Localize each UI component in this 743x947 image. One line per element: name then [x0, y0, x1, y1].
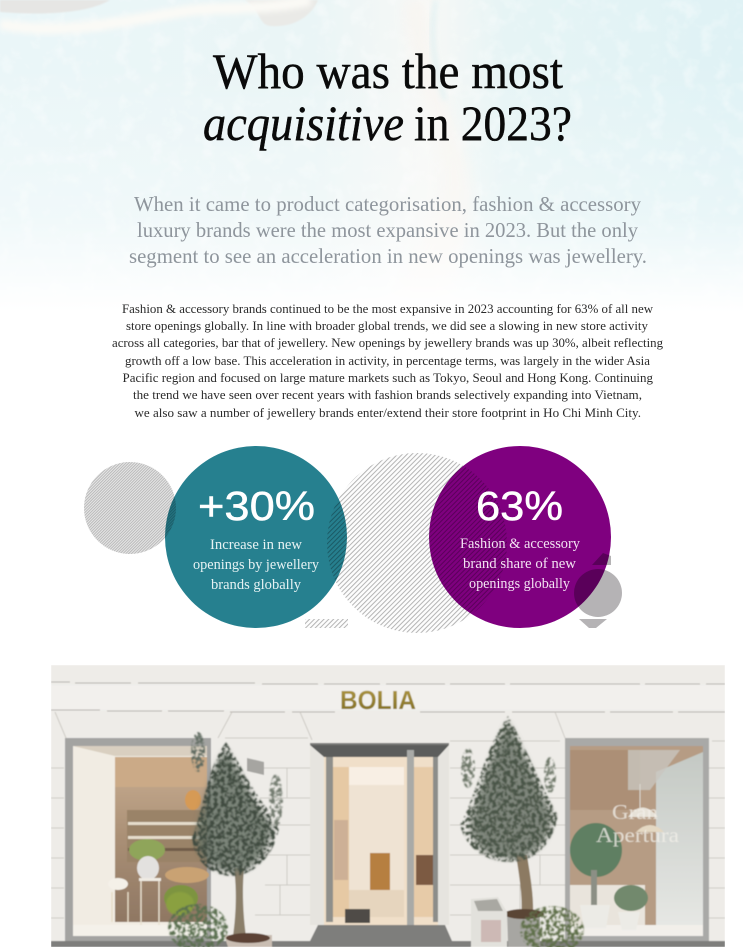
body paragraph: Pacific region and focused on large mature markets such as Tokyo, Seoul and Hong Kong. Continuing: [122, 371, 654, 385]
facade wall: [51, 665, 725, 947]
decorative hatched strip: [305, 619, 348, 628]
pavement: [51, 925, 725, 947]
stat circles group: [84, 446, 622, 633]
store sign: BOLIA: [340, 685, 416, 715]
title: [203, 43, 572, 151]
decorative grey shapes: [574, 553, 622, 628]
stat circle fill: teal: [165, 446, 347, 628]
body paragraph: store openings globally. In line with broader global trends, we did see a slowing in new store activity: [126, 319, 649, 333]
window lettering: [596, 800, 680, 847]
intro text: segment to see an acceleration in new openings was jewellery.: [129, 244, 647, 268]
intro text: When it came to product categorisation, fashion & accessory: [134, 192, 641, 216]
ticket box: [471, 897, 507, 947]
stat: +30%: [193, 483, 320, 593]
title: Who was the most: [213, 43, 563, 99]
title: in 2023?: [414, 95, 572, 151]
store photo: BOLIA facade: [51, 665, 725, 947]
entrance door: [310, 743, 449, 925]
left window: [65, 738, 211, 941]
stat: +30%: openings by jewellery: [193, 557, 320, 573]
intro text: [129, 192, 647, 268]
window lettering: Gran: [612, 800, 659, 824]
body paragraph: across all categories, bar that of jewellery. New openings by jewellery brands was up 30%, albeit reflecting: [112, 336, 664, 350]
wall lamp: [247, 758, 264, 775]
stat: 63%: 63%: [476, 483, 563, 529]
window lettering: Apertura: [596, 823, 680, 847]
body paragraph: Fashion & accessory brands continued to be the most expansive in 2023 accounting for 63% of all new: [122, 302, 654, 316]
stat: 63%: brand share of new: [463, 556, 576, 572]
body paragraph: we also saw a number of jewellery brands enter/extend their store footprint in Ho Chi Minh City.: [134, 406, 641, 420]
stat: +30%: Increase in new: [210, 537, 302, 553]
background: faded aerial coastline: [0, 0, 743, 320]
left olive tree: [166, 732, 283, 947]
title: acquisitive: [203, 95, 404, 151]
stat: +30%: brands globally: [211, 577, 302, 593]
body paragraph: the trend we have seen over recent years with fashion brands selectively expanding into Vietnam,: [133, 388, 642, 402]
body paragraph: [112, 302, 664, 420]
stat: 63%: openings globally: [469, 576, 571, 592]
intro text: luxury brands were the most expansive in 2023. But the only: [137, 218, 638, 242]
stat: +30%: +30%: [198, 483, 315, 529]
right olive tree: [460, 716, 584, 947]
body paragraph: growth off a low base. This acceleration in activity, in percentage terms, was largely in the wider Asia: [125, 354, 650, 368]
stat: 63%: [460, 483, 581, 592]
stat: 63%: Fashion & accessory: [460, 536, 581, 552]
decorative hatched circle: large: [327, 453, 507, 633]
decorative hatched circle: small grey: [84, 462, 176, 554]
stat circle fill: purple: [429, 446, 611, 628]
right window: [565, 738, 709, 941]
